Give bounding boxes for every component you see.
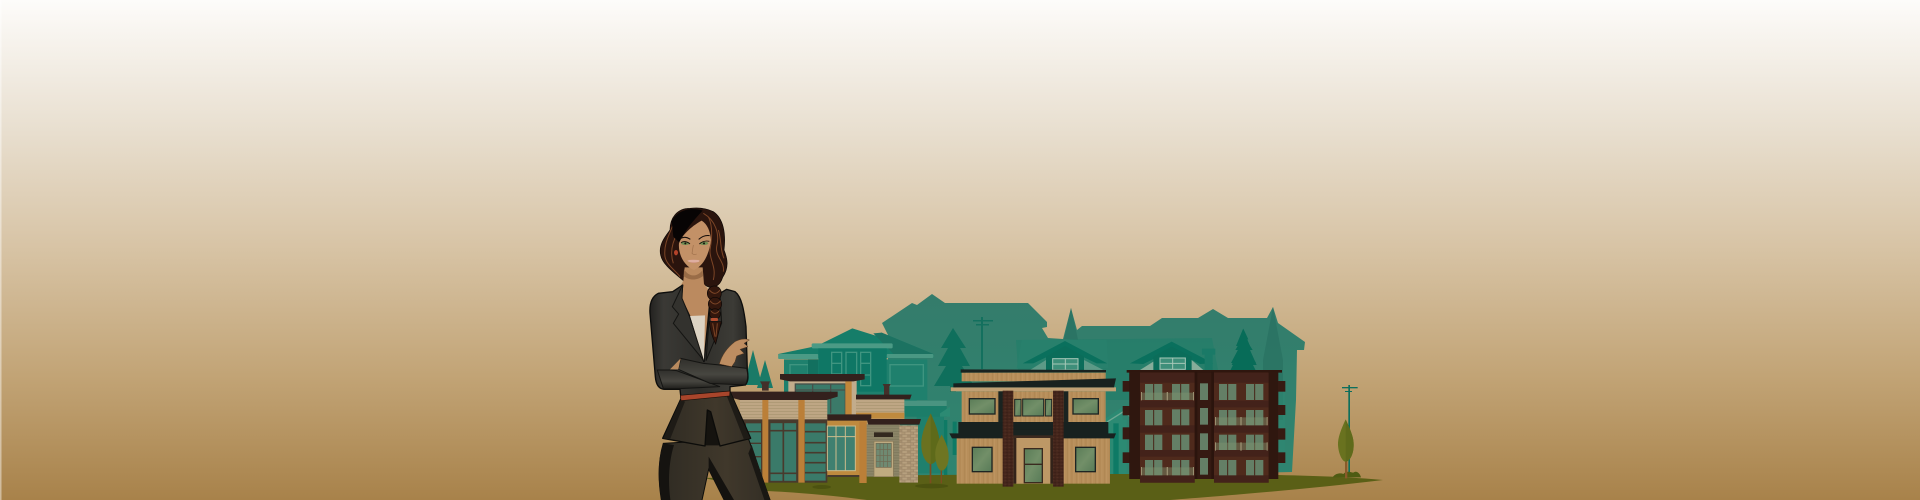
eyes brows lips — [680, 235, 710, 263]
ground — [704, 474, 1383, 500]
face — [679, 221, 711, 270]
entry wing — [867, 424, 900, 477]
right wing — [856, 398, 904, 419]
crossed arms — [657, 370, 720, 389]
far teal house silhouettes — [882, 294, 1305, 478]
jacket — [650, 285, 748, 398]
middle teal house — [778, 328, 947, 473]
far right gabled teal house — [940, 340, 1140, 475]
modern house left — [730, 374, 921, 483]
braid — [707, 286, 722, 344]
background pine trees and utility pole — [744, 317, 1257, 392]
centre glass wing — [827, 420, 867, 477]
belt — [680, 391, 730, 401]
jacket peplum — [663, 392, 751, 446]
back hair — [660, 208, 727, 287]
main volume — [740, 398, 827, 420]
olive trees — [812, 413, 949, 489]
neck and chest — [675, 267, 714, 357]
pants — [659, 438, 771, 500]
hand — [719, 339, 749, 367]
right utility pole, tree and bushes — [1333, 385, 1361, 478]
jacket slit backing — [703, 398, 721, 445]
two-storey wood house — [949, 369, 1116, 487]
right teal gable and chimney — [1130, 329, 1285, 463]
apartment building — [1123, 370, 1285, 483]
upper volume — [760, 374, 891, 416]
woman in dark suit — [650, 208, 771, 500]
